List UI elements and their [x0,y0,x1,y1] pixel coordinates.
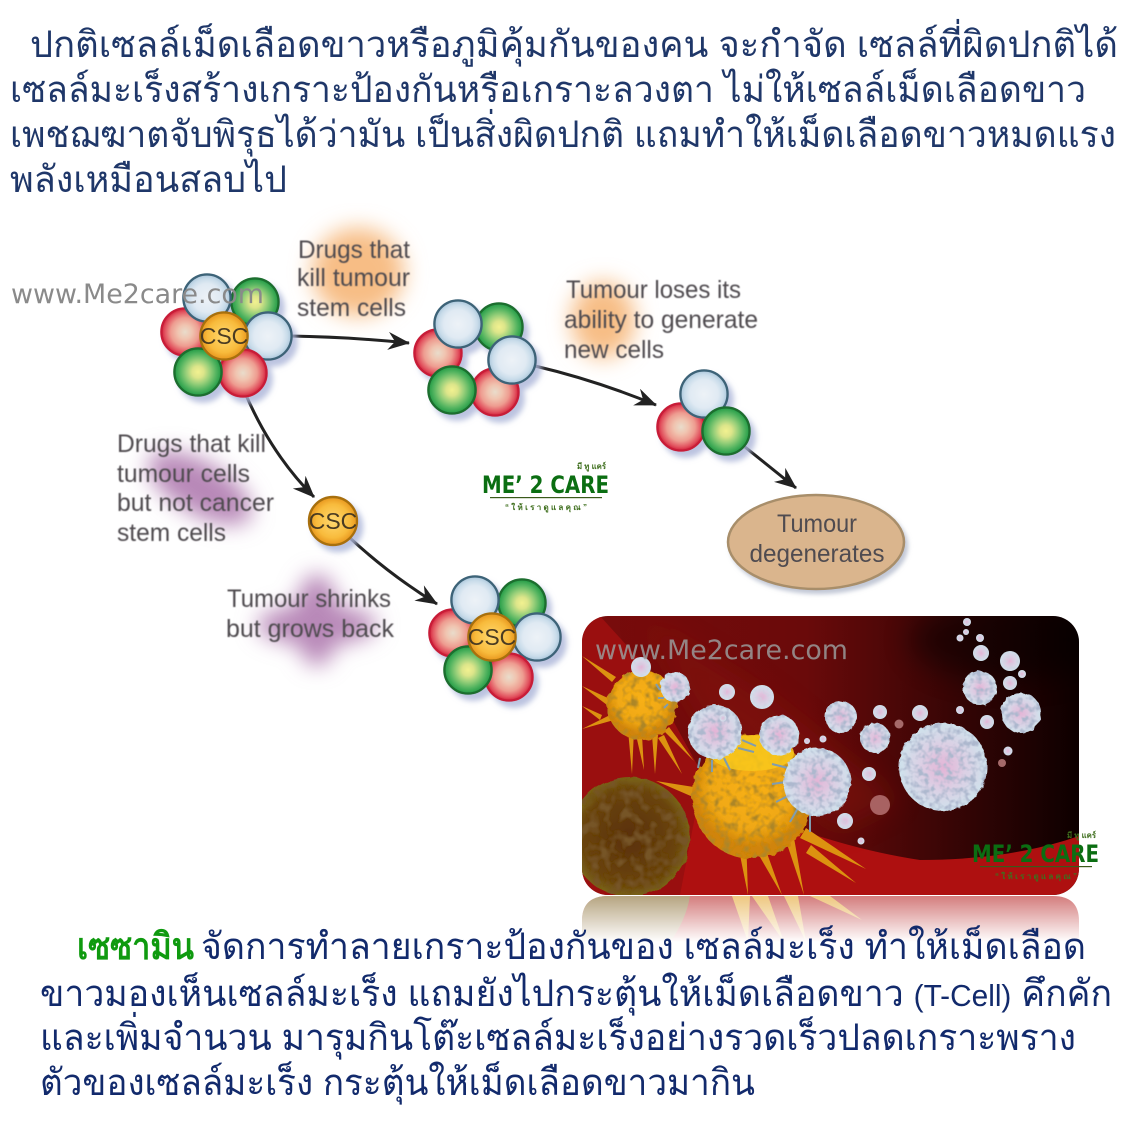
label: drugs that kill tumour stem cells [297,236,410,322]
label: drugs that kill tumour cells only: Drugs that kill [117,430,266,458]
label: drugs that kill tumour stem cells: kill tumour [297,264,410,292]
photo background [582,616,1079,895]
cancer cell spikes [582,656,866,895]
bottom paragraph: จัดการทำลายเกราะป้องกันของ เซลล์มะเร็ง ทำให้เม็ดเลือด [201,923,1086,967]
cell cluster: regrown tumour [429,576,561,701]
label: tumour shrinks: Tumour shrinks [227,585,391,613]
single cancer stem cell: CSC [309,508,357,534]
label: drugs that kill tumour cells only [117,430,274,547]
label: tumour loses ability: ability to generate [564,306,758,334]
bottom paragraph: และเพิ่มจำนวน มารุมกินโต๊ะเซลล์มะเร็งอย่างรวดเร็วปลดเกราะพราง [40,1011,1076,1060]
tumour degenerates oval: degenerates [750,540,884,568]
arrows [246,336,796,604]
label: tumour loses ability [564,276,758,364]
label: drugs that kill tumour cells only: but not cancer [117,489,274,517]
white blood cells: large [660,671,1041,816]
label: tumour loses ability: Tumour loses its [566,276,741,304]
logo: ME 2 CARE on photo: “ให้เราดูแลคุณ” [995,871,1077,882]
logo: ME 2 CARE on photo [972,830,1099,882]
white blood cell legs [656,684,810,832]
logo: ME 2 CARE centre: “ให้เราดูแลคุณ” [505,502,587,513]
logo: ME 2 CARE centre: มี ทู แคร์ [577,461,607,472]
top paragraph: พลังเหมือนสลบไป [10,158,287,200]
top paragraph: เพชฌฆาตจับพิรุธได้ว่ามัน เป็นสิ่งผิดปกติ แถมทำให้เม็ดเลือดขาวหมดแรง [10,108,1116,157]
top paragraph: เซลล์มะเร็งสร้างเกราะป้องกันหรือเกราะลวงตา ไม่ให้เซลล์เม็ดเลือดขาว [10,66,1086,110]
reflection of photo [582,896,1079,942]
label: tumour shrinks: but grows back [226,615,394,643]
highlighted word: sesamin: เซซามิน [77,926,194,967]
bottom paragraph: ขาวมองเห็นเซลล์มะเร็ง แถมยังไปกระตุ้นให้เม็ดเลือดขาว (T-Cell) คึกคัก [40,970,1112,1016]
label: tumour shrinks [226,585,394,643]
label glow blobs [137,228,635,666]
white blood cells: small [631,618,1026,844]
cell cluster: three remaining cells [657,370,750,455]
diagram: cancer stem cell therapy [117,228,904,701]
tumour degenerates oval [728,495,904,589]
logo: ME 2 CARE centre [482,461,609,513]
label: drugs that kill tumour stem cells: Drugs that [298,236,410,264]
cell cluster: after stem cells killed [414,300,536,416]
bottom paragraph [40,923,1112,1105]
label: drugs that kill tumour stem cells: stem cells [297,294,406,322]
logo: ME 2 CARE centre: ME’ 2 CARE [482,471,609,499]
cancer cell: upper [607,670,677,740]
logo: ME 2 CARE on photo: ME’ 2 CARE [972,840,1099,868]
top paragraph: ปกติเซลล์เม็ดเลือดขาวหรือภูมิคุ้มกันของคน จะกำจัด เซลล์ที่ผิดปกติได้ [30,18,1118,67]
dying cell: brown [582,776,690,895]
bottom paragraph: ตัวของเซลล์มะเร็ง กระตุ้นให้เม็ดเลือดขาวมากิน [40,1059,755,1105]
label: tumour loses ability: new cells [564,336,664,364]
cell cluster: initial tumour [161,274,292,397]
label: drugs that kill tumour cells only: tumour cells [117,460,250,488]
watermark: diagram: www.Me2care.com [11,279,264,310]
tumour degenerates oval: Tumour [777,510,857,538]
photo: white blood cells attacking cancer cells [582,616,1079,895]
single cancer stem cell [309,497,357,545]
cell cluster: initial tumour: CSC [200,323,248,349]
top paragraph [10,18,1118,200]
cell cluster: regrown tumour: CSC [468,624,516,650]
logo: ME 2 CARE on photo: มี ทู แคร์ [1067,830,1097,841]
watermark: photo: www.Me2care.com [595,635,848,666]
label: drugs that kill tumour cells only: stem cells [117,519,226,547]
cancer cell: large centre [692,735,812,859]
